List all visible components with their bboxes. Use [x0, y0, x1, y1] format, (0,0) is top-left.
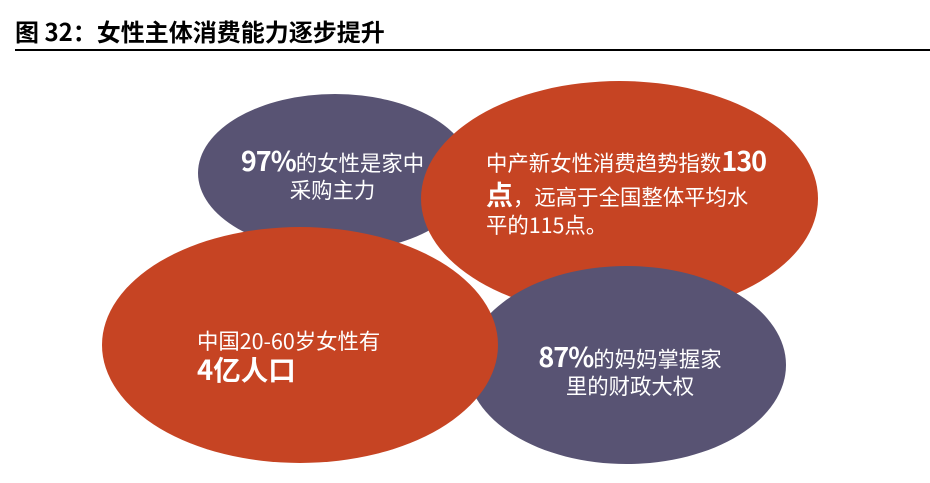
ellipse: red right: [421, 81, 818, 316]
title: 图 32：女性主体消费能力逐步提升: [15, 13, 385, 48]
text: 4亿人口: 4亿人口: [197, 348, 296, 388]
text: 87%: 87%的妈妈掌握家: [538, 336, 722, 375]
text: 97%: [241, 140, 424, 204]
text: 87%: [538, 336, 722, 401]
ellipse: purple bottom: [467, 266, 786, 464]
text: 130 index: 中产新女性消费趋势指数130: [486, 140, 766, 179]
ellipse: purple top: [198, 94, 472, 252]
ellipse: red left: [102, 227, 498, 463]
text: 97%: 97%的女性是家中: [241, 140, 424, 178]
text: 87%: 里的财政大权: [566, 370, 694, 401]
text: 130 index: 点，远高于全国整体平均水: [486, 174, 748, 213]
text: 130 index: 平的115点。: [486, 209, 607, 240]
text: 97%: 采购主力: [290, 174, 375, 204]
text: 4亿人口: [197, 325, 380, 388]
text: 4亿人口: 中国20-60岁女性有: [197, 325, 380, 356]
text: 130 index: [486, 140, 766, 240]
